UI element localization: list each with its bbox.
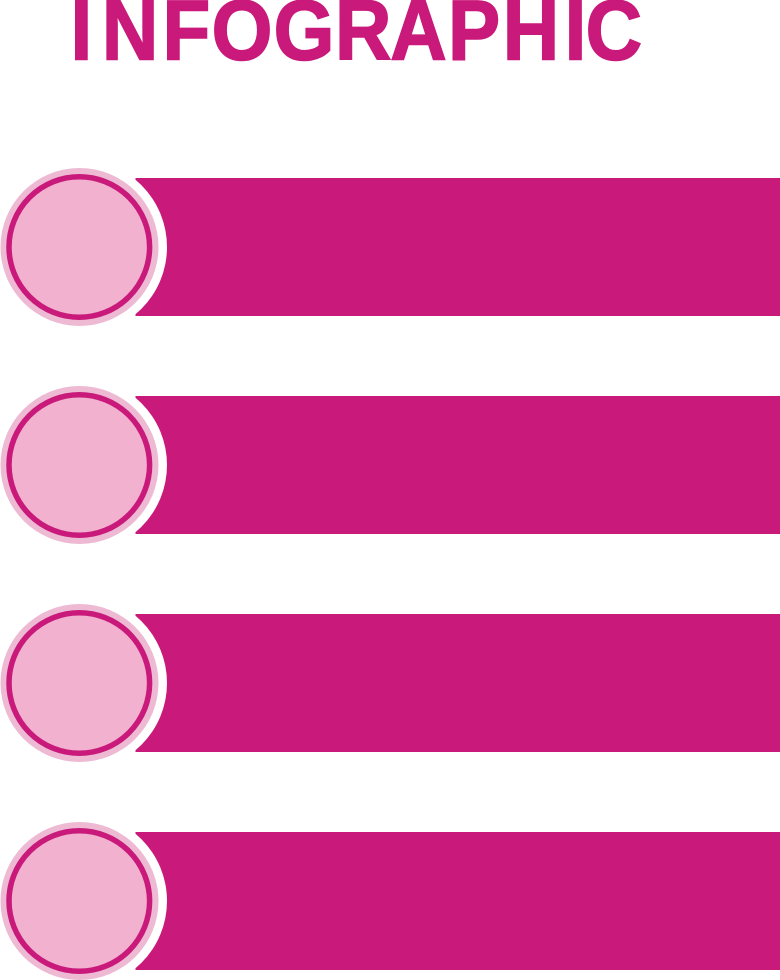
circle 3 badge	[0, 604, 158, 762]
circle 1 badge	[0, 168, 158, 326]
circle 3 white cutout	[0, 596, 167, 770]
bar 3	[136, 614, 780, 752]
row 4	[0, 814, 780, 980]
circle 2 badge	[0, 386, 158, 544]
bar 4	[136, 832, 780, 970]
circle 2 white cutout	[0, 378, 167, 552]
circle 1 white cutout	[0, 160, 167, 334]
circle 4 badge	[0, 822, 158, 980]
row 1	[0, 160, 780, 334]
circle 4 white cutout	[0, 814, 167, 980]
bar 1	[136, 178, 780, 316]
row 3	[0, 596, 780, 770]
row 2	[0, 378, 780, 552]
bar 2	[136, 396, 780, 534]
